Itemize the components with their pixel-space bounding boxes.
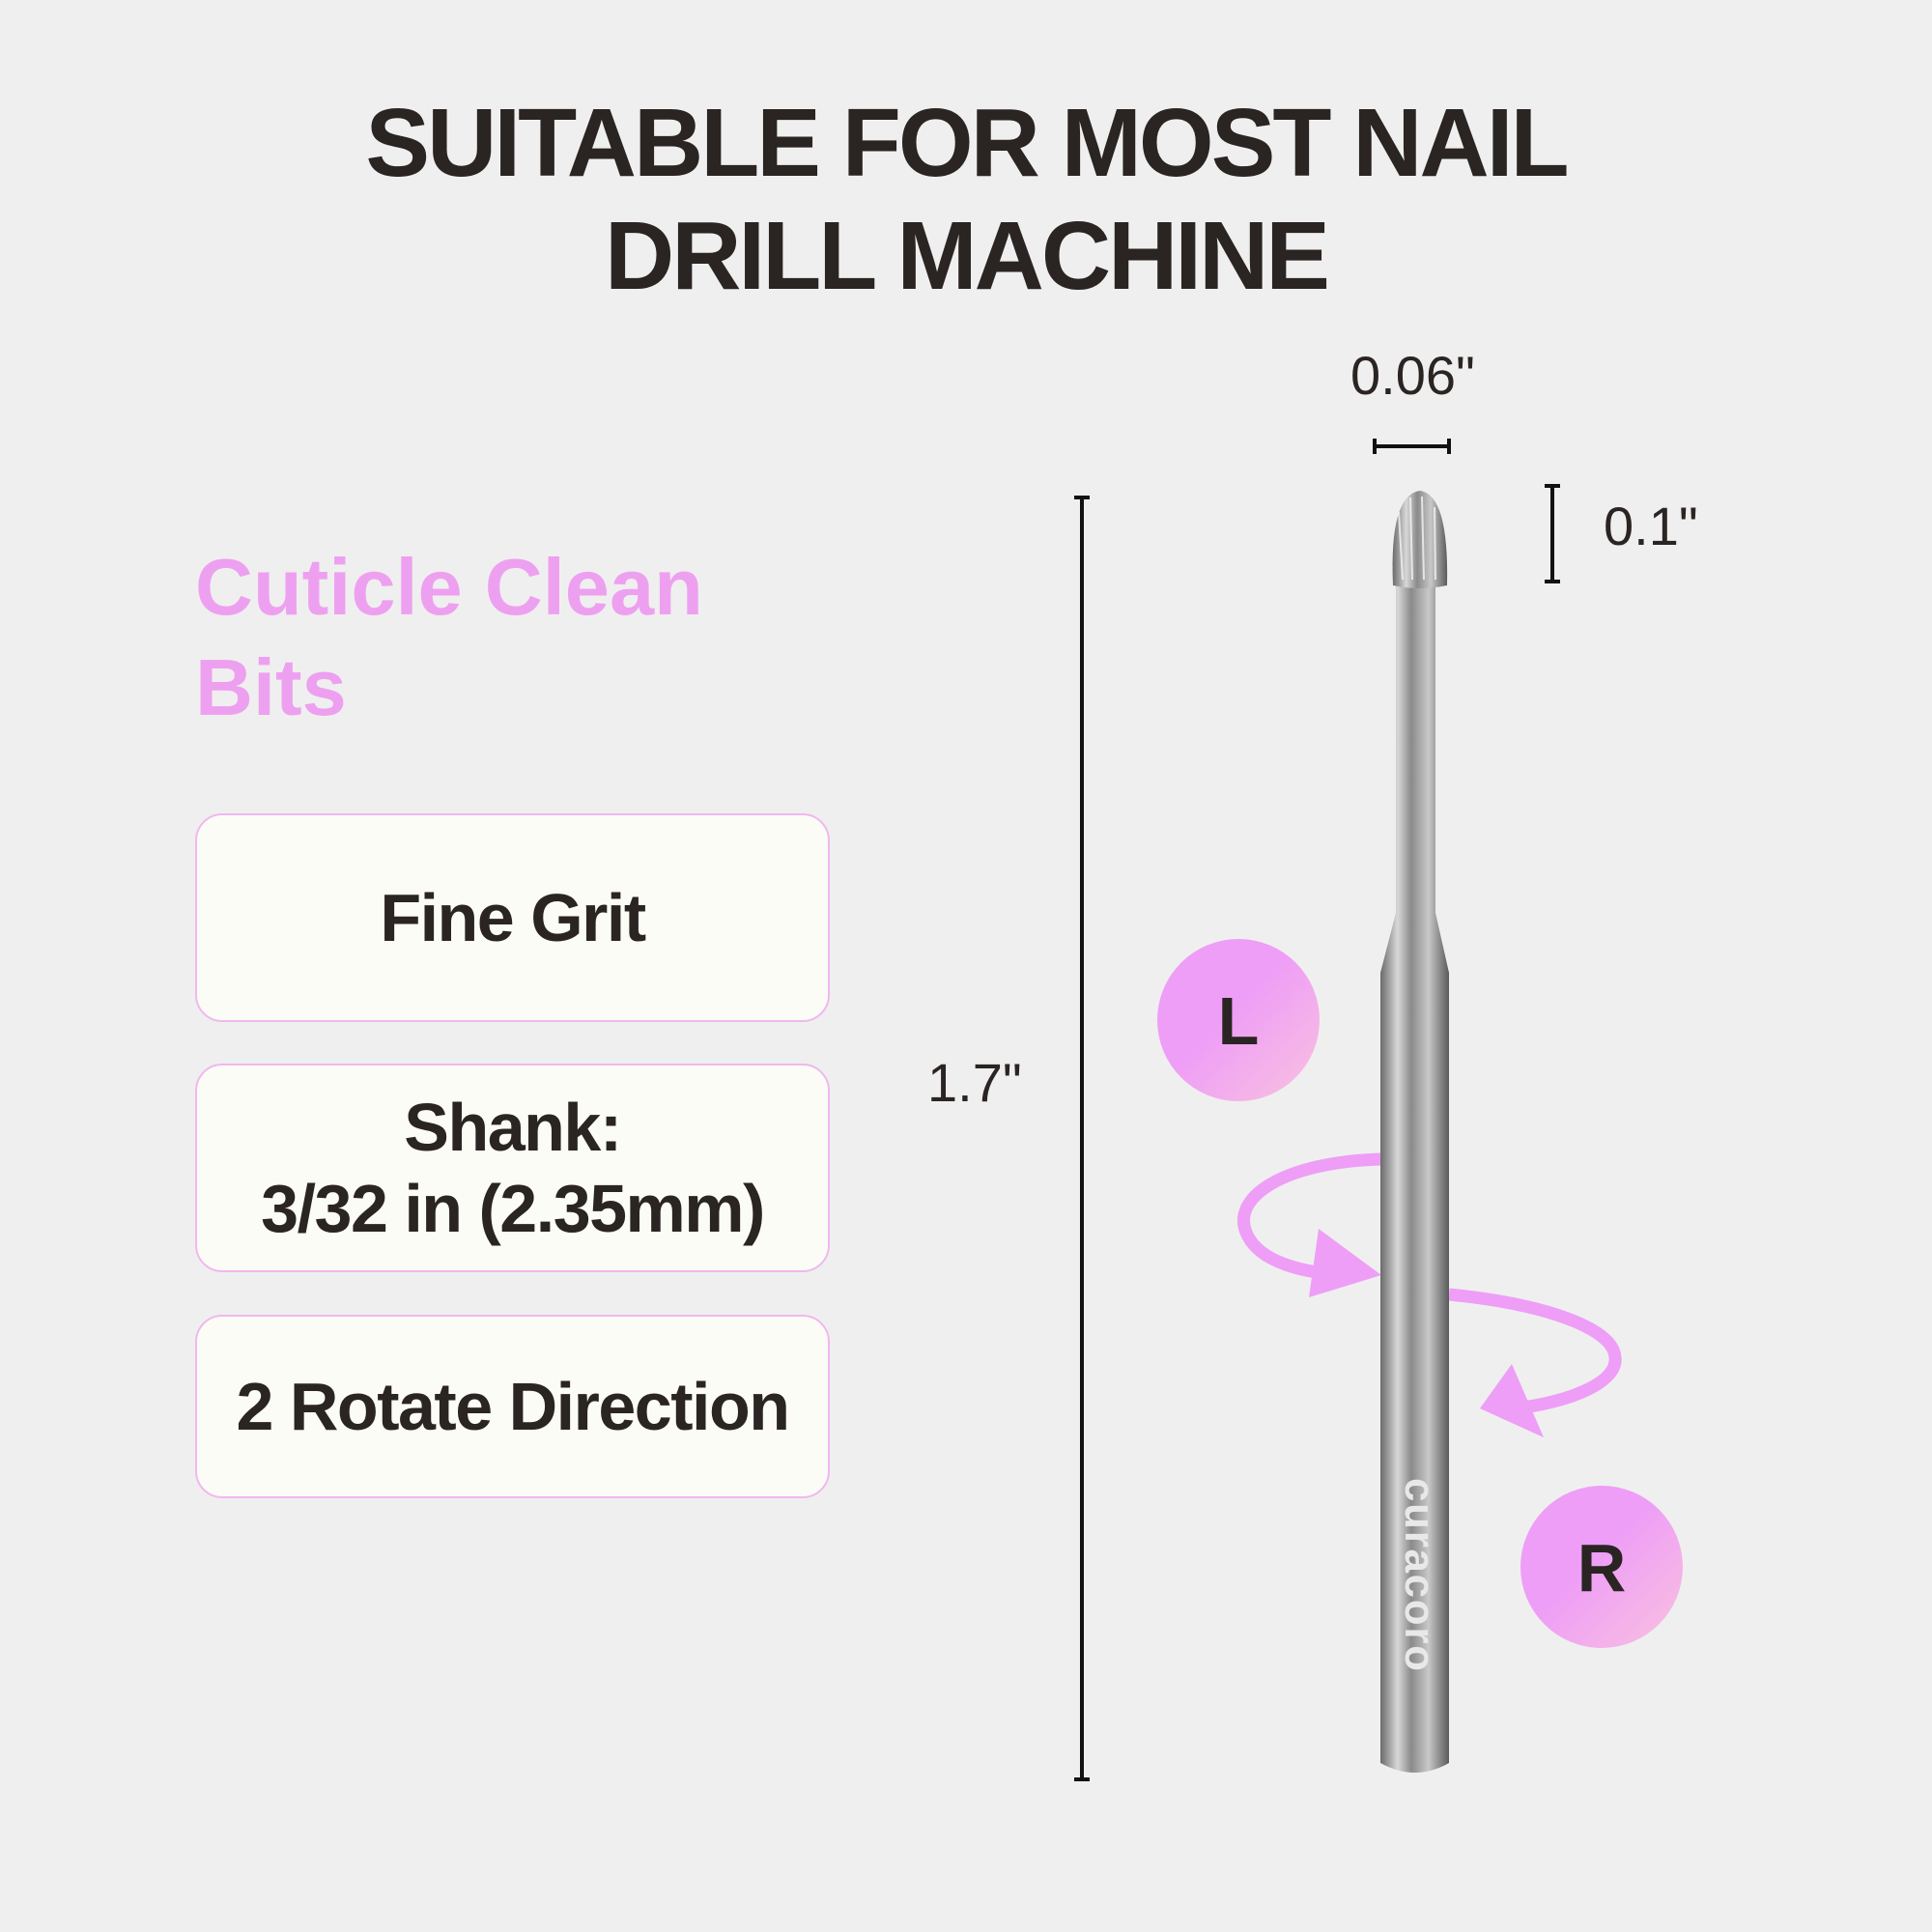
badge: L (1157, 939, 1320, 1101)
title: SUITABLE FOR MOST NAIL (365, 89, 1567, 197)
badge: L: L (1218, 983, 1259, 1059)
box: Rotate direction (195, 1315, 830, 1498)
title (365, 89, 1567, 310)
box: Fine Grit: Fine Grit (380, 880, 645, 955)
badge: R: R (1577, 1530, 1626, 1605)
title: DRILL MACHINE (605, 202, 1327, 310)
subtitle: Cuticle Clean Bits (195, 542, 703, 732)
arrow: right rotation (1449, 1294, 1615, 1437)
dimension line: length (1074, 497, 1090, 1779)
box: Shank (195, 1064, 830, 1272)
badge: R (1520, 1486, 1683, 1648)
subtitle: Cuticle Clean Bits: Cuticle Clean (195, 542, 703, 632)
brand text on shank: curacoro (1396, 1478, 1443, 1671)
box: Shank: 3/32 in (2.35mm) (261, 1171, 764, 1246)
dimension line: head width (1375, 439, 1449, 454)
box: Fine Grit (195, 813, 830, 1022)
box: Shank: Shank: (404, 1090, 621, 1165)
label: 1.7 inch: 1.7" (927, 1052, 1022, 1113)
box: Rotate direction: 2 Rotate Direction (236, 1369, 788, 1444)
dimension line: head height (1545, 486, 1560, 582)
drill bit (1380, 491, 1449, 1773)
arrow: left rotation (1243, 1159, 1383, 1297)
subtitle: Cuticle Clean Bits: Bits (195, 642, 347, 732)
label: 0.1 inch: 0.1" (1604, 496, 1698, 556)
label: 0.06 inch: 0.06" (1350, 345, 1475, 406)
